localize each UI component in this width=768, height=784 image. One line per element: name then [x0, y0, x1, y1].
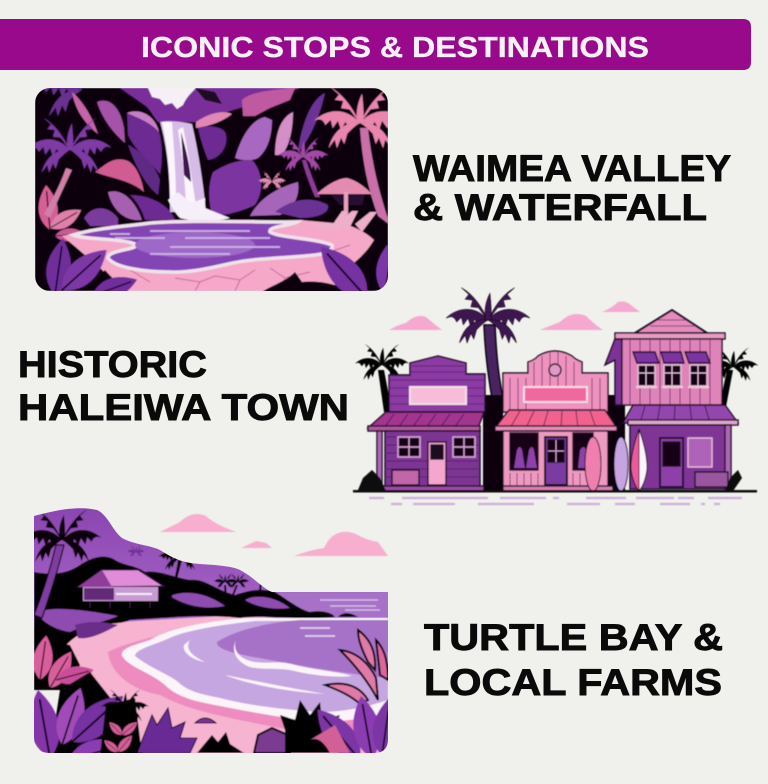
label: Waimea Valley — [413, 148, 731, 228]
pink foliage — [37, 159, 144, 242]
palm: left purple — [28, 118, 112, 218]
title banner — [0, 19, 751, 70]
label: Historic Haleiwa Town — [18, 344, 349, 428]
foreground plants centre — [100, 689, 290, 755]
label: Waimea Valley: WAIMEA VALLEY — [413, 148, 731, 189]
title: ICONIC STOPS & DESTINATIONS — [141, 32, 649, 64]
right rock faces — [196, 93, 328, 218]
foreground pink leaves left — [34, 634, 94, 691]
palm: large foreground — [34, 510, 102, 620]
hill highlights — [36, 593, 290, 638]
clouds: Turtle Bay — [160, 514, 388, 556]
label: Waimea Valley: & WATERFALL — [413, 187, 707, 228]
sand — [60, 615, 388, 755]
label: Historic Haleiwa Town: HISTORIC — [18, 344, 207, 385]
clouds — [389, 302, 640, 330]
panel: Waimea Valley illustration — [35, 88, 388, 291]
deck — [62, 220, 374, 291]
sky and canopy gap — [120, 88, 300, 122]
small distant palms — [128, 546, 271, 598]
ground line and street dashes — [353, 470, 757, 504]
label: Turtle Bay: TURTLE BAY & — [424, 617, 723, 658]
palm: right pink — [314, 88, 388, 225]
label: Turtle Bay: LOCAL FARMS — [424, 662, 722, 703]
umbrella and loungers — [310, 178, 377, 232]
waterfall — [160, 121, 230, 221]
foreground leaves — [45, 238, 388, 291]
label: Turtle Bay — [424, 617, 723, 703]
beach house — [78, 570, 163, 608]
treeline and headland — [34, 556, 358, 646]
panel: Turtle Bay illustration — [34, 508, 388, 753]
panel: Haleiwa town illustration — [353, 288, 759, 504]
water shallows — [108, 618, 388, 734]
palms behind buildings — [355, 288, 759, 490]
building: left purple shop — [368, 356, 485, 491]
sky-side hill — [30, 505, 390, 625]
left rock faces — [72, 92, 175, 226]
pool — [73, 221, 332, 272]
building: middle pink shop — [495, 351, 617, 491]
label: Historic Haleiwa Town: HALEIWA TOWN — [18, 387, 349, 428]
foreground purple leaves left — [34, 672, 124, 753]
top-left fronds — [44, 88, 83, 117]
sea — [240, 592, 390, 652]
building: right two-storey shop — [605, 310, 738, 489]
foreground plants right — [280, 628, 388, 753]
palm: small purple — [277, 137, 329, 197]
surfboards — [585, 429, 647, 491]
